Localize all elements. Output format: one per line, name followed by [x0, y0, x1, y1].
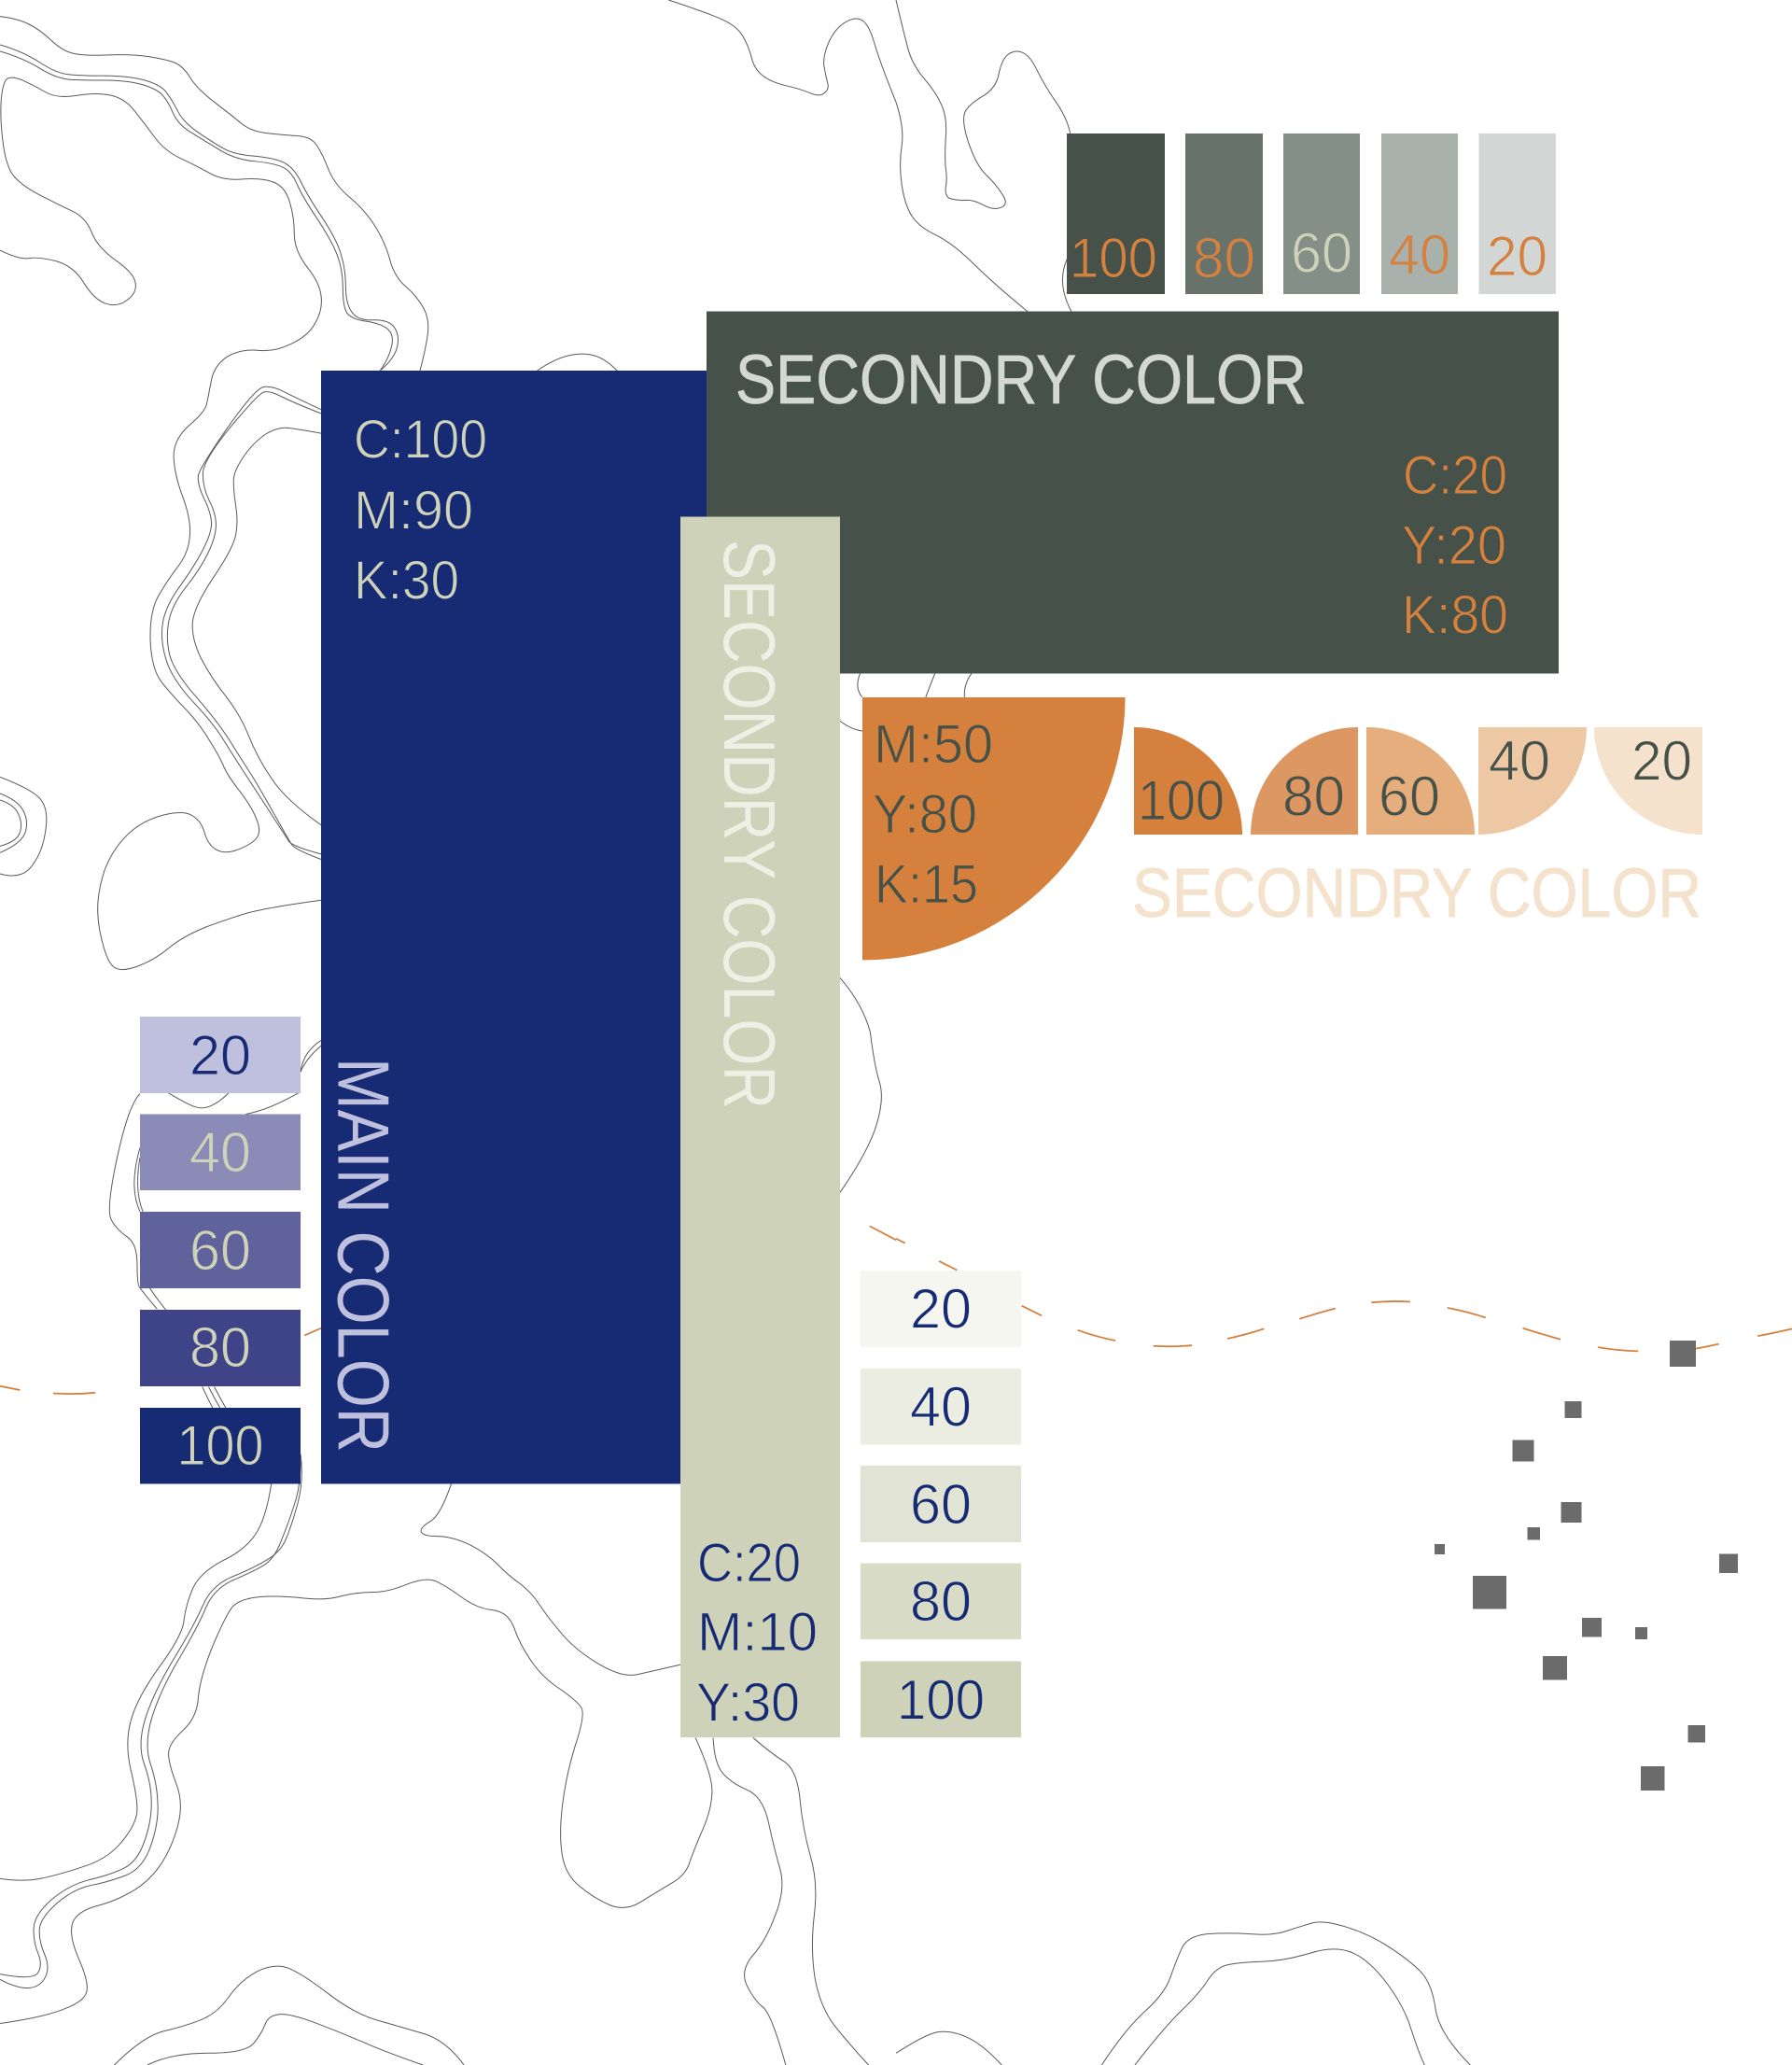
main color CMYK values	[354, 409, 487, 611]
heading: main color: MAIN COLOR	[323, 1058, 405, 1453]
swatch: dark 20	[1478, 133, 1556, 294]
orange tint swatches	[1134, 727, 1702, 835]
dark secondary CMYK values: K:80	[1402, 584, 1508, 646]
swatch: dark 60: 60	[1291, 222, 1352, 284]
heading: sage secondary: SECONDRY COLOR	[708, 540, 791, 1109]
sage CMYK values: Y:30	[696, 1673, 800, 1733]
swatch: main 80: 80	[189, 1316, 251, 1379]
swatch: dark 100	[1067, 133, 1165, 294]
orange CMYK values: K:15	[875, 854, 978, 915]
swatch: dark 20: 20	[1487, 225, 1547, 288]
heading: dark secondary: SECONDRY COLOR	[735, 341, 1307, 418]
swatch: orange 40: 40	[1489, 730, 1550, 792]
sage tint swatches	[861, 1271, 1021, 1737]
dark secondary CMYK values	[1402, 445, 1508, 646]
swatch: orange 80: 80	[1282, 766, 1345, 827]
sage CMYK values	[696, 1533, 818, 1733]
swatch: orange 100: 100	[1138, 769, 1225, 832]
panel: orange secondary color	[862, 697, 1126, 960]
panel: main color	[321, 371, 709, 1484]
orange CMYK values: Y:80	[873, 784, 977, 845]
main color CMYK values: K:30	[354, 551, 459, 611]
swatch: sage 20: 20	[910, 1277, 972, 1341]
swatch: main 80	[140, 1310, 301, 1386]
swatch: sage 100	[861, 1662, 1021, 1737]
sage CMYK values: M:10	[697, 1602, 818, 1663]
dark secondary CMYK values: Y:20	[1402, 515, 1506, 576]
main color CMYK values: M:90	[354, 480, 473, 541]
swatch: orange 60: 60	[1379, 766, 1440, 827]
swatch: sage 100: 100	[897, 1669, 985, 1731]
swatch: orange 40	[1478, 727, 1587, 835]
swatch: dark 100: 100	[1070, 227, 1157, 289]
swatch: sage 40: 40	[910, 1376, 972, 1438]
scattered gray squares	[1435, 1341, 1738, 1791]
swatch: sage 40	[861, 1369, 1021, 1445]
swatch: main 60	[140, 1212, 301, 1288]
swatch: orange 20	[1594, 727, 1702, 835]
swatch: sage 60: 60	[910, 1473, 972, 1536]
swatch: dark 40	[1381, 133, 1458, 294]
main color tint swatches	[140, 1017, 301, 1484]
dark secondary CMYK values: C:20	[1403, 445, 1507, 506]
swatch: main 20	[140, 1017, 301, 1093]
swatch: dark 80: 80	[1193, 227, 1255, 289]
panel: sage secondary color	[680, 517, 840, 1737]
swatch: main 40: 40	[189, 1121, 251, 1184]
swatch: orange 60	[1366, 727, 1475, 835]
orange CMYK values: M:50	[874, 714, 993, 775]
swatch: main 20: 20	[189, 1024, 251, 1087]
dashed orange route line	[0, 1226, 1792, 1394]
swatch: sage 20	[861, 1271, 1021, 1347]
swatch: orange 100	[1134, 727, 1242, 835]
sage CMYK values: C:20	[697, 1533, 801, 1594]
swatch: sage 80	[861, 1563, 1021, 1639]
swatch: main 100	[140, 1408, 301, 1484]
swatch: dark 40: 40	[1389, 224, 1450, 286]
swatch: main 100: 100	[177, 1414, 263, 1477]
swatch: sage 80: 80	[910, 1570, 972, 1633]
swatch: main 60: 60	[189, 1219, 251, 1282]
swatch: dark 80	[1185, 133, 1263, 294]
swatch: dark 60	[1283, 133, 1360, 294]
main color CMYK values: C:100	[354, 409, 487, 471]
orange CMYK values	[873, 714, 993, 915]
dark secondary tint swatches	[1067, 133, 1556, 294]
swatch: main 40	[140, 1115, 301, 1190]
swatch: sage 60	[861, 1466, 1021, 1542]
swatch: orange 80	[1251, 727, 1358, 835]
panel: dark secondary color	[707, 312, 1559, 674]
swatch: orange 20: 20	[1631, 730, 1692, 792]
heading: orange secondary: SECONDRY COLOR	[1132, 854, 1701, 932]
